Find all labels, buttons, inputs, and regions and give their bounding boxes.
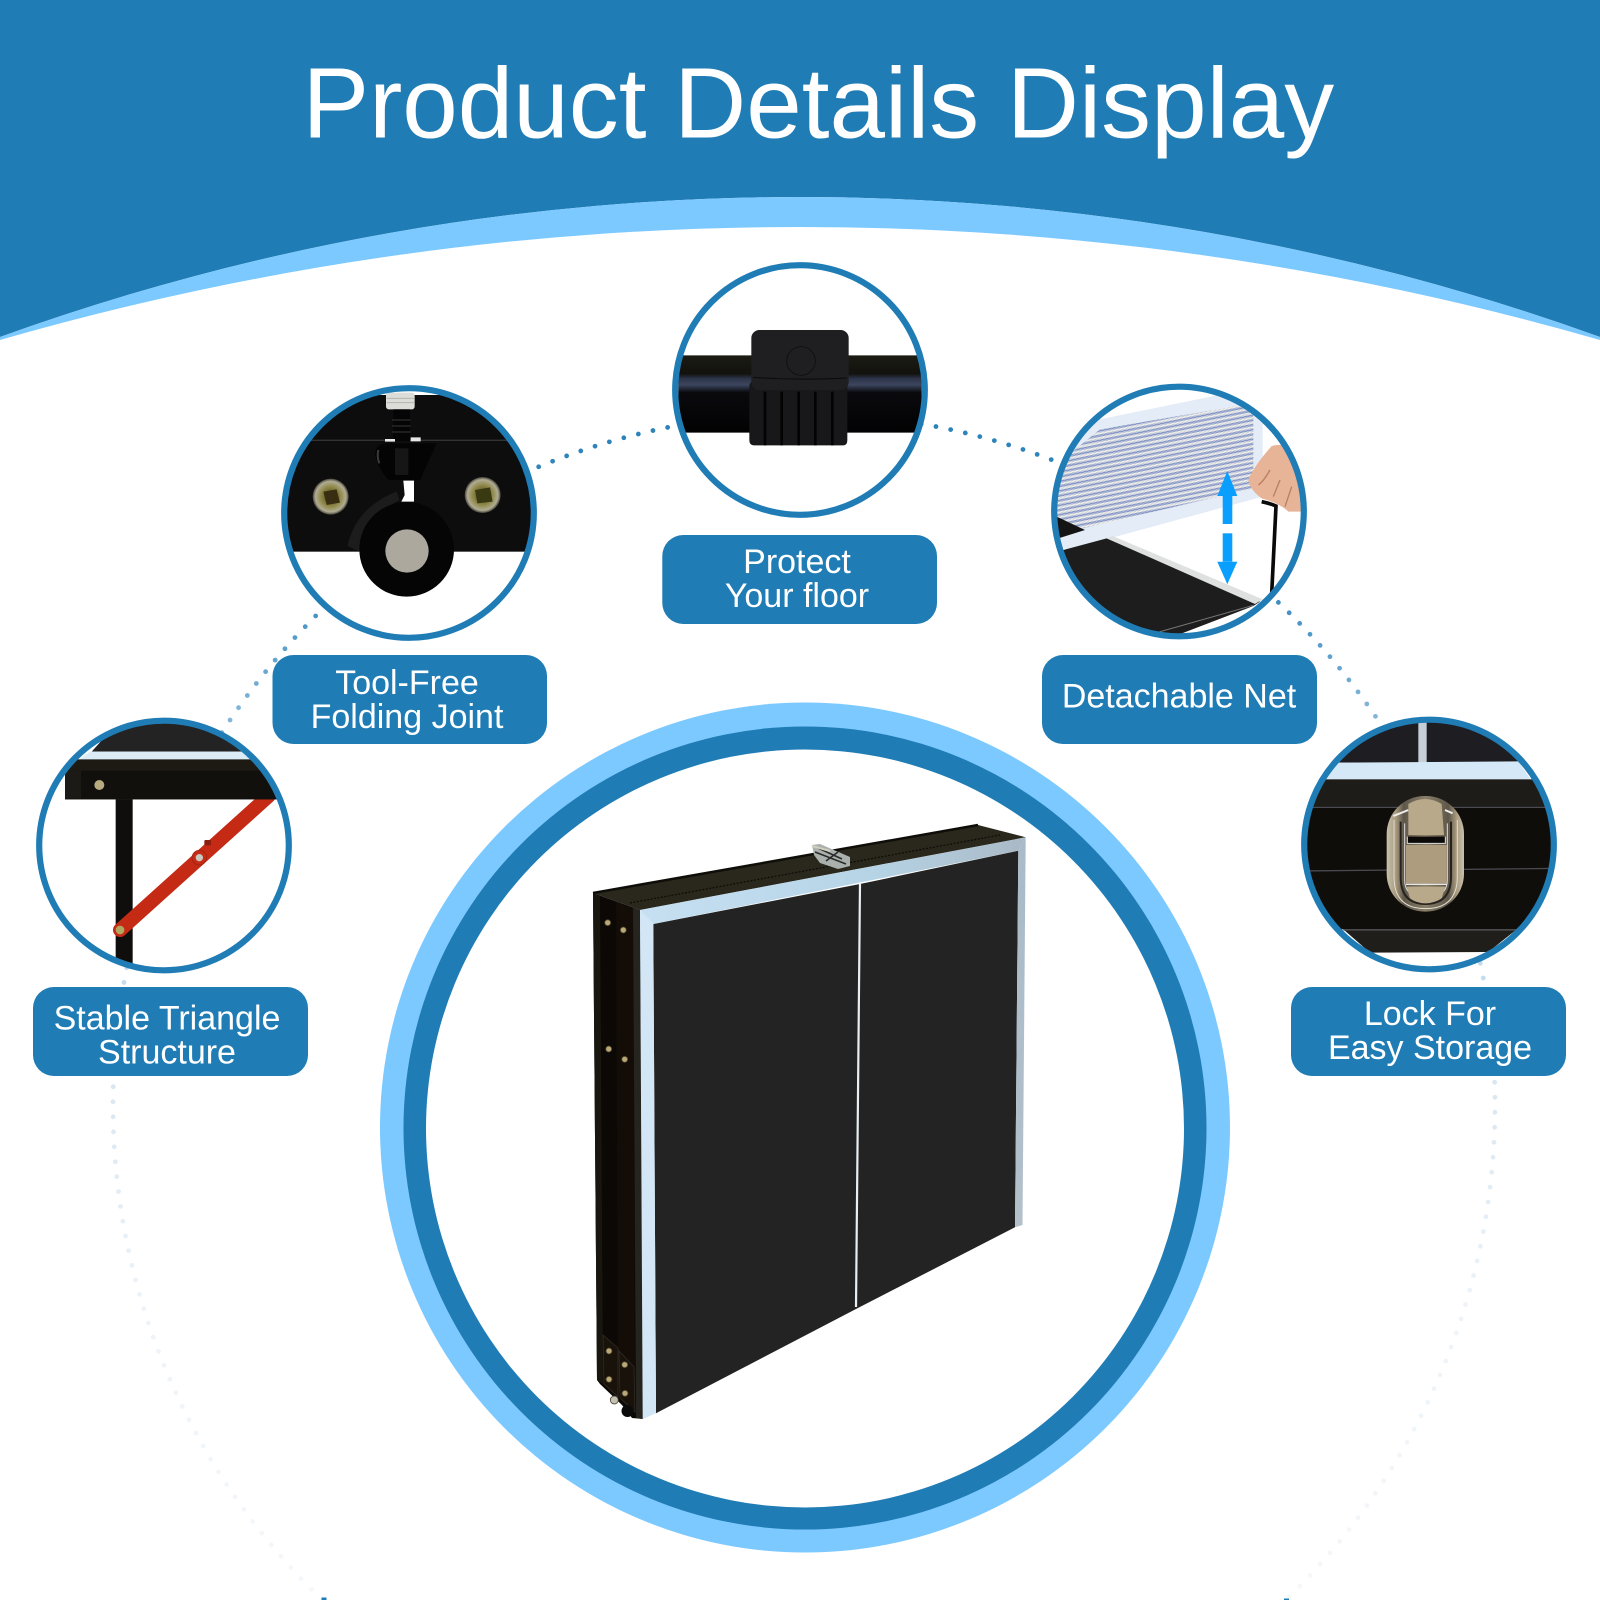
circle fill <box>675 265 925 515</box>
label: lock for easy storage <box>1291 987 1566 1076</box>
label: tool-free folding joint: Folding Joint <box>311 698 504 736</box>
table centre line <box>856 882 860 1307</box>
label: detachable net: Detachable Net <box>1062 678 1297 716</box>
latch illustration <box>1300 720 1567 953</box>
table top border <box>640 837 1026 924</box>
white centre <box>426 750 1184 1508</box>
dotted connector ends at page bottom <box>322 1598 1289 1600</box>
circle fill <box>1054 386 1304 636</box>
header light blue arc <box>0 197 1600 340</box>
foot <box>622 1405 634 1417</box>
label: detachable net <box>1042 655 1317 744</box>
label: stable triangle structure <box>33 987 308 1076</box>
label: lock for easy storage: Lock For <box>1364 995 1496 1033</box>
label: protect your floor: Protect <box>743 543 851 581</box>
label: protect your floor: Your floor <box>725 577 869 615</box>
leg and brace illustration <box>65 720 278 969</box>
joint photo illustration <box>277 393 543 597</box>
circle fill <box>39 720 289 970</box>
table right border <box>1015 837 1026 1227</box>
label: stable triangle structure: Stable Triangle <box>54 1000 280 1038</box>
side rivets <box>605 920 628 1404</box>
panel: tool-free folding joint <box>277 388 543 638</box>
circle fill <box>284 388 534 638</box>
panel: protect your floor <box>675 265 925 515</box>
panel: lock for easy storage <box>1300 720 1567 970</box>
net illustration <box>1050 393 1303 637</box>
title: Product Details Display <box>302 48 1334 160</box>
label: stable triangle structure: Structure <box>98 1034 236 1072</box>
label: protect your floor <box>662 535 937 624</box>
circle ring <box>1054 387 1304 636</box>
dotted connector arc <box>113 414 1495 1600</box>
double arrow <box>1217 471 1237 584</box>
table top edge surface <box>593 825 1026 910</box>
panel: stable triangle structure <box>39 720 289 970</box>
outer light ring <box>380 702 1230 1552</box>
circle ring <box>284 388 534 638</box>
table left border <box>640 910 656 1419</box>
table latch <box>812 844 850 869</box>
circle ring <box>39 721 289 970</box>
label: tool-free folding joint <box>272 655 547 744</box>
header band <box>0 0 1600 337</box>
label: tool-free folding joint: Tool-Free <box>335 664 479 702</box>
circle fill <box>1304 720 1554 970</box>
dark ring <box>404 726 1206 1530</box>
panel: detachable net <box>1050 386 1304 637</box>
circle ring <box>675 265 925 515</box>
circle ring <box>1304 720 1554 969</box>
label: lock for easy storage: Easy Storage <box>1328 1029 1532 1067</box>
panel: folded table main circle <box>380 702 1230 1552</box>
table playing surface <box>653 851 1018 1413</box>
tube foot illustration <box>678 330 922 445</box>
table side edge <box>593 893 643 1419</box>
folded table <box>593 825 1026 1419</box>
